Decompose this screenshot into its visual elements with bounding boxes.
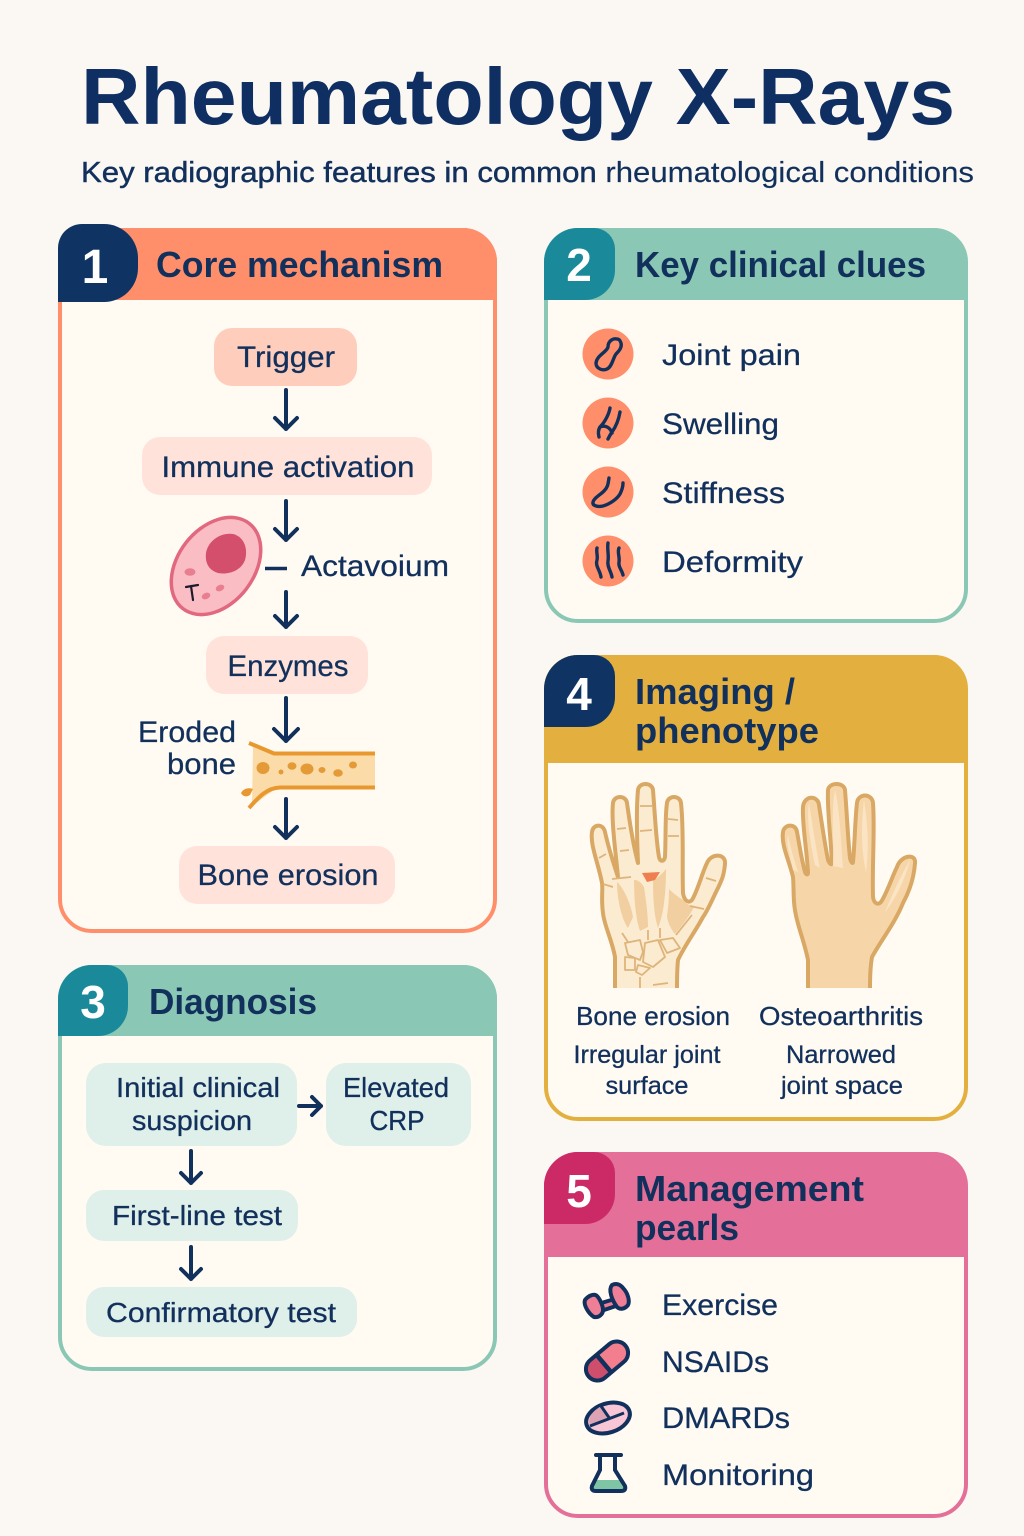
panel: diagnosis bbox=[58, 965, 497, 1369]
labels: bone erosion: Bone erosion bbox=[576, 1001, 730, 1031]
panel: key clinical clues bbox=[544, 228, 967, 621]
heading: diagnosis: Diagnosis bbox=[149, 981, 317, 1022]
step: first-line test: First-line test bbox=[112, 1200, 282, 1231]
label: eroded bone: Eroded bbox=[138, 716, 236, 749]
item: monitoring: Monitoring bbox=[662, 1459, 814, 1492]
labels: osteoarthritis: Osteoarthritis bbox=[759, 1001, 923, 1031]
arrow bbox=[299, 1097, 321, 1115]
heading: imaging / phenotype: Imaging / bbox=[635, 671, 795, 712]
step: first-line test bbox=[86, 1190, 298, 1241]
labels: osteoarthritis: Narrowed bbox=[786, 1041, 896, 1069]
arrow bbox=[275, 799, 297, 838]
labels: bone erosion: surface bbox=[606, 1072, 688, 1100]
heading: core mechanism: Core mechanism bbox=[156, 244, 443, 285]
item: DMARDs bbox=[582, 1397, 790, 1439]
item: exercise: Exercise bbox=[662, 1289, 778, 1322]
item: stiffness: Stiffness bbox=[662, 477, 785, 510]
step: initial clinical suspicion bbox=[86, 1063, 297, 1146]
badge 5: 5 bbox=[566, 1165, 592, 1217]
icon: plain hand bbox=[783, 784, 915, 988]
panel header: diagnosis bbox=[58, 965, 497, 1036]
arrow bbox=[275, 390, 297, 429]
panel header: core mechanism bbox=[58, 228, 497, 300]
panel header: management bbox=[544, 1152, 967, 1257]
panel: core mechanism bbox=[58, 224, 497, 931]
item: joint pain: Joint pain bbox=[662, 339, 801, 372]
badge 3: 3 bbox=[80, 976, 106, 1028]
label: Actavoium: Actavoium bbox=[301, 550, 449, 583]
step: initial clinical suspicion: suspicion bbox=[132, 1105, 252, 1136]
step: immune activation: Immune activation bbox=[162, 451, 414, 484]
step: enzymes: Enzymes bbox=[228, 650, 348, 683]
item: swelling: Swelling bbox=[662, 408, 779, 441]
icon: T cell bbox=[153, 500, 279, 632]
item: joint pain bbox=[582, 328, 801, 380]
heading: management pearls: Management bbox=[635, 1168, 864, 1209]
arrow bbox=[181, 1151, 201, 1183]
item: NSAIDs bbox=[581, 1337, 769, 1385]
panel: management pearls bbox=[544, 1152, 967, 1516]
arrow bbox=[181, 1247, 201, 1279]
step: elevated CRP bbox=[326, 1063, 471, 1146]
item: DMARDs: DMARDs bbox=[662, 1402, 790, 1435]
step: confirmatory test: Confirmatory test bbox=[106, 1297, 336, 1328]
step: enzymes bbox=[206, 636, 368, 694]
labels: osteoarthritis: joint space bbox=[780, 1072, 903, 1100]
arrow bbox=[275, 501, 297, 540]
labels: osteoarthritis bbox=[759, 1001, 923, 1100]
item: deformity: Deformity bbox=[662, 546, 803, 579]
step: bone erosion bbox=[179, 846, 395, 904]
badge 4: 4 bbox=[566, 668, 592, 720]
icon: eroded bone bbox=[241, 743, 375, 808]
panel: imaging / phenotype bbox=[544, 655, 967, 1119]
item: monitoring bbox=[592, 1455, 814, 1492]
subtitle: Key radiographic features in common rheumatological conditions bbox=[81, 157, 974, 189]
step: bone erosion: Bone erosion bbox=[198, 859, 378, 892]
badge 1 bbox=[58, 224, 138, 302]
dash bbox=[265, 567, 287, 570]
heading: imaging / phenotype bbox=[635, 671, 819, 751]
badge 3 bbox=[58, 965, 128, 1036]
badge 1: 1 bbox=[82, 241, 108, 294]
step: trigger: Trigger bbox=[237, 341, 335, 374]
heading: imaging / phenotype: phenotype bbox=[635, 710, 819, 751]
label: eroded bone bbox=[138, 716, 236, 781]
badge 2: 2 bbox=[566, 239, 592, 291]
title: Rheumatology X-Rays bbox=[81, 52, 955, 141]
step: elevated CRP: Elevated bbox=[343, 1072, 449, 1103]
step: confirmatory test bbox=[86, 1287, 357, 1337]
heading: clinical clues: Key clinical clues bbox=[635, 244, 926, 285]
step: initial clinical suspicion: Initial clinical bbox=[116, 1072, 280, 1103]
item: exercise bbox=[585, 1284, 778, 1322]
badge 4 bbox=[544, 655, 615, 727]
badge 5 bbox=[544, 1152, 615, 1224]
step: trigger bbox=[214, 328, 357, 386]
arrow bbox=[275, 592, 297, 627]
item: NSAIDs: NSAIDs bbox=[662, 1346, 769, 1379]
arrow bbox=[274, 698, 298, 741]
step: elevated CRP: CRP bbox=[370, 1105, 424, 1136]
heading: management pearls: pearls bbox=[635, 1207, 739, 1248]
item: deformity bbox=[582, 536, 803, 586]
panel header: clinical clues bbox=[544, 228, 967, 300]
labels: bone erosion bbox=[574, 1001, 730, 1100]
labels: bone erosion: Irregular joint bbox=[574, 1041, 721, 1069]
item: stiffness bbox=[582, 466, 785, 518]
heading: management pearls bbox=[635, 1168, 864, 1248]
panel header: imaging bbox=[544, 655, 967, 763]
item: swelling bbox=[582, 398, 779, 448]
step: immune activation bbox=[142, 437, 432, 495]
badge 2 bbox=[544, 228, 615, 300]
icon: x-ray hand bbox=[592, 784, 725, 988]
label: eroded bone: bone bbox=[167, 748, 236, 781]
